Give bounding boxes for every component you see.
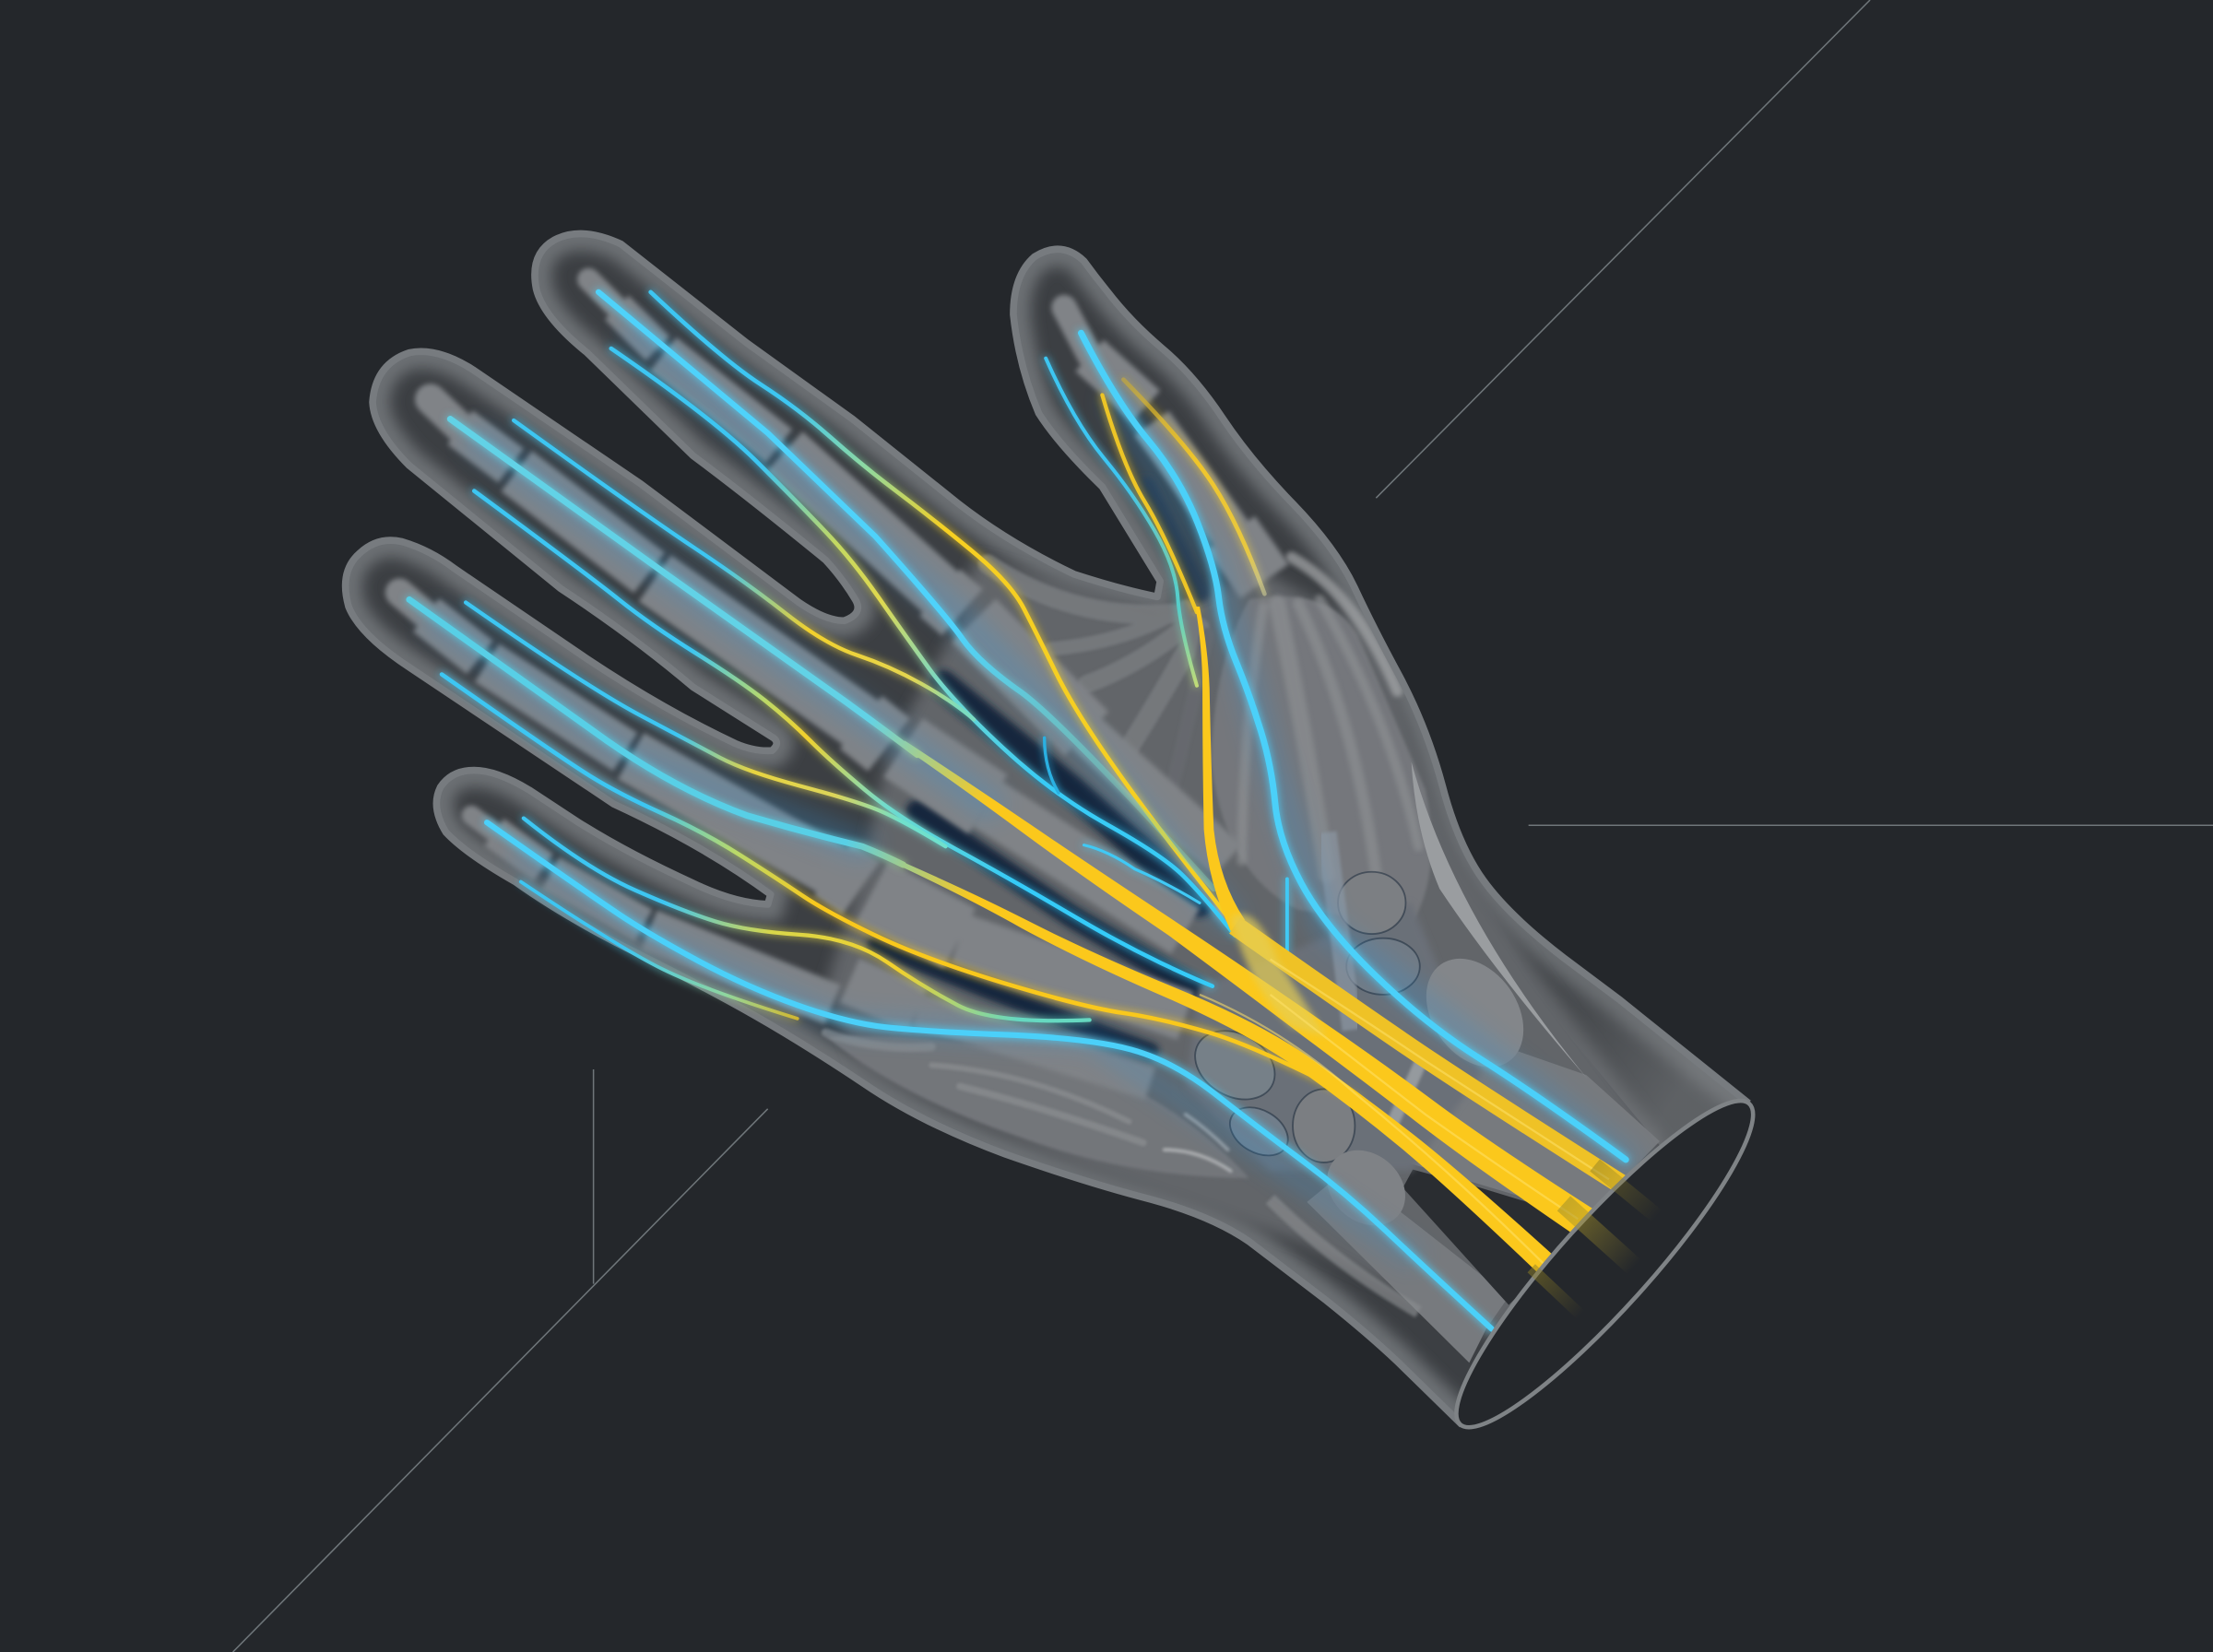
convergence zone <box>1231 914 1327 1037</box>
third finger nerves <box>409 599 1357 1099</box>
bones of third finger <box>399 593 1186 1016</box>
lower wrist highlight <box>1271 1199 1418 1312</box>
second finger nerves <box>450 419 1213 986</box>
hand interior: tissue, bones and muscles <box>346 234 1748 1425</box>
navy channels between metacarpals <box>875 487 1200 1051</box>
carpal bones <box>1188 831 1523 1212</box>
tapered thumb trunk <box>1195 607 1245 931</box>
nerve tails fading inside the wrist <box>1532 1165 1657 1315</box>
trunk C to wrist <box>861 845 1572 1292</box>
thumb nerves <box>1046 333 1626 1160</box>
yellow nerve bundle <box>861 380 1620 1292</box>
trunk highlights <box>1200 960 1609 1272</box>
palm tissue <box>825 557 1665 1340</box>
soft inner rim glow <box>346 234 1748 1425</box>
blue and green nerve branches <box>409 292 1626 1329</box>
hypothenar muscle <box>825 1032 1249 1178</box>
bones of little finger <box>471 816 1150 1083</box>
wrist tendon sliver <box>1412 761 1588 1080</box>
trunk A to wrist <box>1235 926 1620 1184</box>
wrist opening <box>1426 1073 1782 1455</box>
bones of first finger <box>588 279 1228 860</box>
little finger nerves <box>487 819 1492 1329</box>
finger and thumb bones <box>399 279 1264 1083</box>
hand outline rim <box>346 234 1748 1425</box>
hand silhouette <box>346 234 1751 1425</box>
wrist tendon bands <box>1307 1038 1660 1363</box>
thenar muscle <box>1211 557 1431 924</box>
blue glow over bones <box>437 332 1626 1256</box>
thumb web fan <box>988 564 1207 790</box>
fine yellow branches <box>1102 380 1264 612</box>
trunk B to wrist <box>902 740 1598 1237</box>
bones of second finger <box>431 399 1186 931</box>
wrist dark gap <box>1403 1169 1570 1305</box>
bones of thumb <box>1064 308 1264 581</box>
first finger nerves <box>598 292 1235 936</box>
wrist upper sheath shading <box>1566 993 1737 1145</box>
